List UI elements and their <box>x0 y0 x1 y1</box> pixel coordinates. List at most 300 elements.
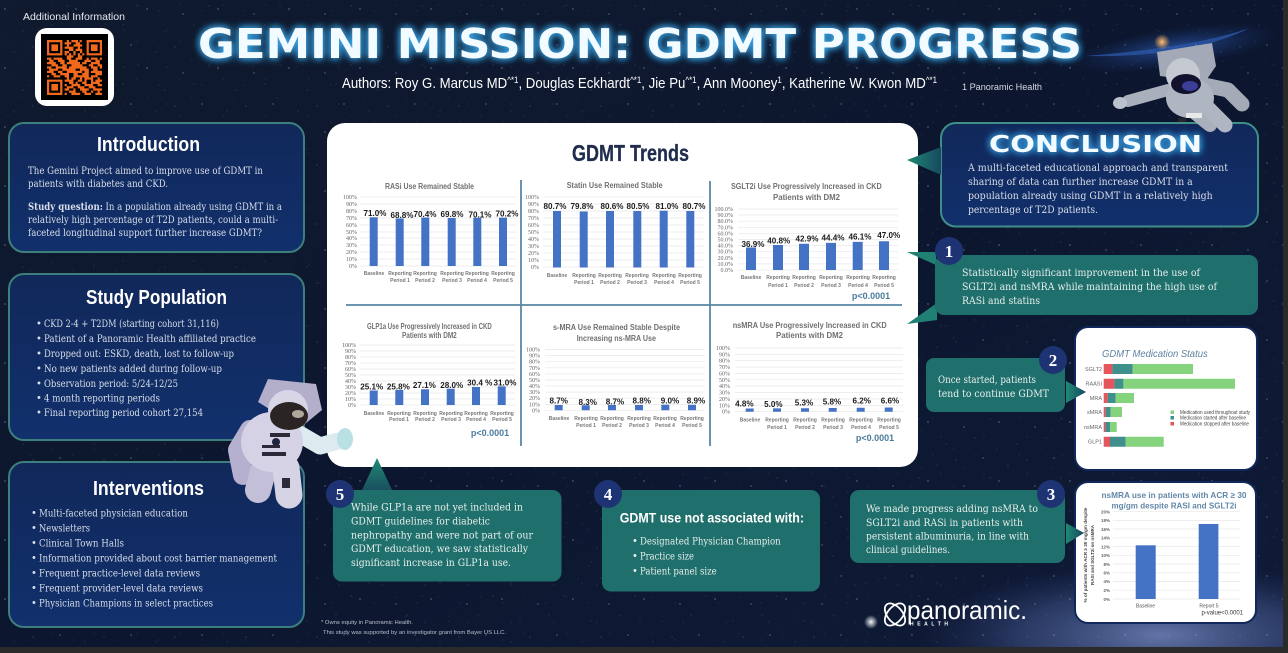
chart: statin: Period 3 <box>627 280 647 286</box>
chart: RASi: 70.2% <box>496 209 518 218</box>
chart: SGLT2i: SGLT2i Use Progressively Increased in CKD <box>731 182 882 191</box>
chart: nsMRA: 30% <box>719 390 730 396</box>
chart: statin: 80.7% <box>544 202 566 211</box>
chart: nsMRA use with ACR: 8% <box>1103 562 1110 567</box>
chart: s-MRA: 30% <box>529 390 540 396</box>
chart: nsMRA: 100% <box>716 346 730 352</box>
callout: finding 3: clinical guidelines. <box>866 545 950 556</box>
callout: finding 1: SGLT2i and nsMRA while maintaining the high use of <box>962 282 1218 293</box>
chart: statin: 0% <box>531 265 539 271</box>
chart: nsMRA use with ACR: Baseline <box>1136 604 1155 610</box>
chart: statin <box>525 181 705 286</box>
arrow: finding 2 <box>1066 381 1086 403</box>
chart: SGLT2i: 60.0% <box>718 231 733 237</box>
chart: s-MRA: 8.9% <box>687 396 705 405</box>
conclusion text: percentage of T2D patients. <box>968 205 1098 216</box>
chart: GLP1a: 31.0% <box>494 378 516 388</box>
astronaut: left <box>238 379 353 495</box>
chart: statin: Reporting <box>598 273 622 279</box>
chart: nsMRA: 6.2% <box>852 397 871 406</box>
chart: nsMRA use with ACR: 0% <box>1103 597 1110 602</box>
study population list: Observation period: 5/24-12/25 <box>44 379 178 390</box>
chart: SGLT2i: Period 1 <box>768 283 788 289</box>
chart: statin: 80.6% <box>601 202 623 211</box>
panel: GDMT trends <box>327 123 918 467</box>
callout: finding 3: We made progress adding nsMRA to <box>866 504 1038 515</box>
authors: Authors: Roy G. Marcus MD <box>342 75 530 92</box>
study population list: CKD 2-4 + T2DM (starting cohort 31,116) <box>44 319 219 330</box>
astronaut: top right <box>1113 43 1242 125</box>
chart: GLP1a: p<0.0001 <box>471 428 509 438</box>
authors: ^*1 <box>685 75 697 85</box>
chart: GDMT medication status: GDMT Medication Status <box>1102 348 1208 360</box>
chart: RASi: Period 3 <box>442 278 462 284</box>
chart: nsMRA: 5.0% <box>764 400 783 409</box>
chart: statin: Reporting <box>678 273 702 279</box>
introduction heading: Introduction <box>97 134 200 156</box>
study population list: 4 month reporting periods <box>44 394 160 404</box>
chart: GLP1a: 60% <box>345 367 356 373</box>
chart: RASi: 40% <box>346 236 357 242</box>
study population list <box>36 319 256 419</box>
chart: nsMRA use with ACR: 20% <box>1101 510 1110 514</box>
chart: SGLT2i: 100.0% <box>714 207 733 213</box>
authors: , Douglas Eckhardt <box>518 75 631 92</box>
chart: statin: 100% <box>525 195 539 201</box>
chart: GLP1a: Period 2 <box>415 417 435 423</box>
callout: finding 4: 4 <box>604 485 613 504</box>
chart: nsMRA use with ACR: mg/gm despite RASI and SGLT2i <box>1112 500 1236 510</box>
chart: GDMT medication status: RAASI <box>1085 382 1102 388</box>
authors: , Ann Mooney <box>697 75 778 92</box>
chart: RASi: 50% <box>346 230 357 236</box>
chart: RASi: 71.0% <box>364 209 386 218</box>
callout: finding 3 <box>850 480 1065 563</box>
callout: finding 5: GDMT guidelines for diabetic <box>351 516 490 528</box>
footnotes <box>321 620 506 636</box>
chart: s-MRA: 80% <box>529 360 540 366</box>
chart: SGLT2i: 0.0% <box>720 268 733 274</box>
chart: SGLT2i: 70.0% <box>718 225 733 231</box>
callout: finding 5: While GLP1a are not yet included in <box>351 502 524 514</box>
chart: RASi <box>343 182 518 284</box>
footnotes: This study was supported by an investigator grant from Bayer US LLC. <box>323 630 506 636</box>
chart: SGLT2i <box>714 182 900 301</box>
conclusion text <box>967 163 1228 216</box>
chart: nsMRA use with ACR: p-value<0.0001 <box>1201 610 1244 616</box>
chart: RASi: Reporting <box>491 271 515 277</box>
GDMT trends heading: GDMT Trends <box>572 140 689 166</box>
chart: SGLT2i: Reporting <box>792 275 816 281</box>
introduction text: The Gemini Project aimed to improve use of GDMT in <box>28 166 263 177</box>
chart: nsMRA use with ACR <box>1075 482 1256 623</box>
interventions list: • <box>31 538 37 550</box>
chart: RASi: Baseline <box>364 271 384 277</box>
chart: nsMRA use with ACR: 14% <box>1101 536 1110 540</box>
chart: RASi: 70.4% <box>414 210 436 219</box>
callout: finding 5: significant increase in GLP1a use. <box>351 558 511 569</box>
panel: introduction <box>9 123 304 252</box>
chart: GLP1a: 0% <box>348 403 356 409</box>
chart: GLP1a: 50% <box>345 373 356 379</box>
chart: statin: 50% <box>528 230 539 236</box>
chart: RASi: 30% <box>346 243 357 249</box>
introduction text: relatively high percentage of T2D patients, could a multi- <box>28 215 278 226</box>
introduction text <box>28 166 282 239</box>
chart: statin: Reporting <box>572 273 596 279</box>
chart: nsMRA: Period 5 <box>879 425 899 431</box>
chart: s-MRA: 10% <box>529 402 540 408</box>
chart: GLP1a <box>342 322 516 438</box>
chart: GLP1a: 30.4 % <box>467 378 492 388</box>
interventions list: • <box>31 524 37 534</box>
chart: s-MRA: 20% <box>529 396 540 402</box>
study population list: Dropped out: ESKD, death, lost to follow-up <box>44 349 234 360</box>
chart: s-MRA: Reporting <box>627 416 651 422</box>
introduction text: faceted longitudinal support further increase GDMT? <box>28 228 262 239</box>
callout: finding 3: SGLT2i and RASi in patients with <box>866 518 1024 529</box>
chart: RASi: 80% <box>346 209 357 215</box>
chart: RASi: Reporting <box>388 271 412 277</box>
chart: SGLT2i: 50.0% <box>718 238 733 244</box>
logo: panoramic health: HEALTH <box>910 622 948 628</box>
arrow: finding 1 upper <box>907 252 936 265</box>
chart: statin: 60% <box>528 223 539 229</box>
chart: s-MRA: 8.8% <box>632 397 651 406</box>
chart: GDMT medication status: MRA <box>1090 396 1102 402</box>
callout: finding 4: GDMT use not associated with: <box>620 510 804 526</box>
chart: s-MRA: 0% <box>532 408 540 414</box>
chart: nsMRA: 0% <box>722 410 730 416</box>
chart: RASi: 68.8% <box>391 211 413 220</box>
chart: GLP1a: 28.0% <box>440 381 463 390</box>
interventions list <box>31 508 277 610</box>
chart: SGLT2i: 90.0% <box>718 213 733 219</box>
chart: nsMRA use with ACR: RASI and SGLT2i on nsMRA <box>1090 524 1095 585</box>
chart: statin: Reporting <box>652 273 676 279</box>
study population list: Final reporting period cohort 27,154 <box>44 408 203 419</box>
chart: GLP1a: Period 4 <box>466 417 486 423</box>
study population list: • <box>36 394 42 404</box>
chart: RASi: RASi Use Remained Stable <box>385 182 474 191</box>
study population list: • <box>36 379 42 390</box>
callout: finding 4: • <box>632 536 638 548</box>
chart: SGLT2i: 42.9% <box>796 235 818 244</box>
study population list: • <box>36 319 42 330</box>
chart: nsMRA use with ACR: Report 5 <box>1199 604 1219 610</box>
chart: s-MRA: 70% <box>529 366 540 372</box>
chart: RASi: Reporting <box>440 271 464 277</box>
arrow: finding 1 lower <box>907 303 937 324</box>
callout: finding 2: tend to continue GDMT <box>938 389 1049 400</box>
chart: GLP1a: Reporting <box>387 411 411 417</box>
interventions list: Physician Champions in select practices <box>39 598 213 610</box>
chart: statin: Baseline <box>547 273 567 279</box>
interventions list: • <box>31 508 37 520</box>
chart: GLP1a: Baseline <box>364 411 384 417</box>
chart: SGLT2i: 30.0% <box>718 250 733 256</box>
chart: statin: 10% <box>528 258 539 264</box>
panel: interventions <box>9 462 304 627</box>
logo: panoramic health <box>881 595 1027 629</box>
chart: GDMT medication status: nsMRA <box>1084 425 1102 431</box>
callout: finding 4: Practice size <box>640 552 694 562</box>
chart: s-MRA: 90% <box>529 354 540 360</box>
chart: nsMRA: Reporting <box>849 418 873 424</box>
chart: RASi: 60% <box>346 223 357 229</box>
authors: ^*1 <box>630 75 641 85</box>
chart: GLP1a: Period 5 <box>492 417 512 423</box>
chart: SGLT2i: 10.0% <box>718 262 733 268</box>
study population list: • <box>36 349 42 360</box>
chart: RASi: 0% <box>349 264 357 270</box>
chart: RASi: 69.8% <box>441 210 463 219</box>
callout: finding 5: nephropathy and were not part of our <box>351 530 533 542</box>
interventions list: Clinical Town Halls <box>39 538 124 550</box>
callout: finding 4: Patient panel size <box>640 566 717 578</box>
callout: finding 4: • <box>632 552 638 562</box>
chart: s-MRA: Period 4 <box>655 423 675 429</box>
chart: nsMRA use with ACR: 18% <box>1101 518 1110 523</box>
introduction text: patients with diabetes and CKD. <box>28 179 168 190</box>
chart: GLP1a: Reporting <box>413 411 437 417</box>
chart: SGLT2i: Period 3 <box>821 283 841 289</box>
callout: finding 1 <box>935 237 1258 315</box>
chart: nsMRA use with ACR: 4% <box>1103 579 1110 584</box>
chart: s-MRA: Reporting <box>574 416 598 422</box>
chart: RASi: Period 2 <box>415 278 435 284</box>
chart: nsMRA use with ACR: 2% <box>1103 588 1110 593</box>
arrow: conclusion to chart <box>907 147 941 175</box>
chart: GDMT medication status: sMRA <box>1087 410 1102 416</box>
panel: study population <box>9 274 304 440</box>
chart: GLP1a: 20% <box>345 391 356 397</box>
callout: finding 4 <box>594 480 820 592</box>
introduction text: Study question: In a population already using GDMT in a <box>28 202 282 213</box>
chart: statin: 79.8% <box>571 202 593 211</box>
chart: SGLT2i: 80.0% <box>718 219 733 225</box>
chart: nsMRA: Period 2 <box>795 425 815 431</box>
chart: nsMRA: Baseline <box>740 418 760 424</box>
callout: finding 2: 2 <box>1049 351 1057 370</box>
interventions list: • <box>31 598 37 610</box>
chart: s-MRA: Period 1 <box>576 423 596 429</box>
chart: s-MRA: Increasing ns-MRA Use <box>577 334 656 343</box>
chart: GDMT medication status: Medication used throughout study <box>1180 410 1250 416</box>
interventions list: Newsletters <box>39 524 90 534</box>
chart: GLP1a: 80% <box>345 355 356 361</box>
chart: statin: Reporting <box>625 273 649 279</box>
chart: SGLT2i: 40.0% <box>718 244 733 250</box>
chart: s-MRA: Reporting <box>600 416 624 422</box>
conclusion text: population already using GDMT in a relatively high <box>968 191 1213 202</box>
chart: GDMT medication status: Medication stopped after baseline <box>1180 422 1249 428</box>
chart: s-MRA: 50% <box>529 378 540 384</box>
arrow: finding 5 <box>362 458 392 490</box>
chart: nsMRA: Reporting <box>793 418 817 424</box>
logo: panoramic health: panoramic. <box>907 595 1027 625</box>
interventions list: Frequent practice-level data reviews <box>39 568 200 580</box>
chart: statin: Period 2 <box>600 280 620 286</box>
callout: finding 2: Once started, patients <box>938 375 1036 386</box>
interventions list: Multi-faceted physician education <box>39 508 188 520</box>
footnotes: * Owns equity in Panoramic Health. <box>321 620 413 626</box>
chart: RASi: 70% <box>346 216 357 222</box>
chart: SGLT2i: Reporting <box>766 275 790 281</box>
chart: nsMRA use with ACR: 12% <box>1101 544 1110 549</box>
chart: s-MRA: 8.7% <box>549 397 568 406</box>
interventions list: • <box>31 568 37 580</box>
chart: nsMRA: 20% <box>719 397 730 403</box>
chart: RASi: 10% <box>346 257 357 263</box>
chart: s-MRA: Baseline <box>549 416 569 422</box>
authors: ^*1 <box>507 75 518 85</box>
interventions list: • <box>31 554 37 564</box>
chart: statin: Period 5 <box>680 280 700 286</box>
chart: nsMRA: 5.3% <box>795 398 813 407</box>
chart: GDMT medication status: SGLT2 <box>1085 367 1102 373</box>
chart: statin: Period 1 <box>574 280 594 286</box>
chart: nsMRA use with ACR: nsMRA use in patients with ACR ≥ 30 <box>1102 490 1247 500</box>
panel: conclusion <box>941 123 1258 226</box>
callout: finding 5 <box>326 480 562 582</box>
study population heading: Study Population <box>86 287 227 309</box>
chart: SGLT2i: Baseline <box>741 275 761 281</box>
chart: nsMRA: 70% <box>719 365 730 371</box>
chart: SGLT2i: 20.0% <box>718 256 733 262</box>
chart: nsMRA: p<0.0001 <box>856 433 894 443</box>
chart: SGLT2i: 47.0% <box>877 231 900 240</box>
authors: , Jie Pu <box>641 75 685 92</box>
chart: nsMRA: Reporting <box>821 418 845 424</box>
chart: statin: 80.5% <box>627 202 649 211</box>
chart: statin: 40% <box>528 237 539 243</box>
chart: nsMRA: Period 3 <box>823 425 843 431</box>
chart: s-MRA: 100% <box>526 348 540 354</box>
chart: SGLT2i: 44.4% <box>822 234 844 243</box>
chart: nsMRA use with ACR: % of patients with ACR ≥ 30 mg/gm despite <box>1083 507 1088 602</box>
chart: nsMRA: 6.6% <box>881 397 899 406</box>
chart: RASi: Reporting <box>465 271 489 277</box>
chart: RASi: Period 1 <box>390 278 410 284</box>
chart: s-MRA: Period 2 <box>602 423 622 429</box>
chart: s-MRA: 60% <box>529 372 540 378</box>
callout: finding 4: Designated Physician Champion <box>640 536 781 548</box>
chart: RASi: 100% <box>343 195 357 201</box>
chart: SGLT2i: Reporting <box>846 275 870 281</box>
chart: RASi: 90% <box>346 202 357 208</box>
chart: nsMRA <box>716 321 903 443</box>
chart: nsMRA: 4.8% <box>735 400 754 409</box>
chart: SGLT2i: 40.8% <box>767 237 790 246</box>
chart: statin: 80.7% <box>683 202 705 211</box>
chart: statin: 81.0% <box>656 202 678 211</box>
chart: GLP1a: Reporting <box>490 411 514 417</box>
chart: GDMT medication status <box>1075 327 1257 470</box>
callout: finding 1: 1 <box>945 242 953 261</box>
chart: nsMRA: Reporting <box>765 418 789 424</box>
chart: nsMRA: nsMRA Use Progressively Increased in CKD <box>733 321 887 330</box>
chart: GLP1a: Reporting <box>439 411 463 417</box>
chart: GLP1a: GLP1a Use Progressively Increased in CKD <box>367 322 492 331</box>
chart: RASi: Period 4 <box>467 278 487 284</box>
chart: SGLT2i: Reporting <box>872 275 896 281</box>
chart: nsMRA use with ACR: 6% <box>1103 570 1110 576</box>
callout: finding 3: persistent albuminuria, in line with <box>866 532 1030 542</box>
chart: s-MRA: 8.3% <box>578 398 597 407</box>
interventions list: Frequent provider-level data reviews <box>39 584 203 594</box>
chart: s-MRA: s-MRA Use Remained Stable Despite <box>553 323 680 332</box>
callout: finding 1: Statistically significant improvement in the use of <box>962 268 1201 279</box>
chart: SGLT2i: Reporting <box>819 275 843 281</box>
chart: SGLT2i: p<0.0001 <box>852 291 890 301</box>
chart: GLP1a: 70% <box>345 361 356 367</box>
chart: GDMT medication status: Medication started after baseline <box>1180 416 1246 422</box>
chart: GLP1a: 90% <box>345 349 356 355</box>
study population list: • <box>36 364 42 375</box>
chart: nsMRA: 50% <box>719 378 730 384</box>
chart: nsMRA: Reporting <box>877 418 901 424</box>
chart: nsMRA: 5.8% <box>823 397 841 406</box>
chart: s-MRA: 9.0% <box>661 396 679 405</box>
chart: nsMRA use with ACR: 10% <box>1101 553 1110 558</box>
chart: s-MRA: Period 5 <box>682 423 702 429</box>
arrow: finding 3 <box>1066 523 1084 544</box>
study population list: No new patients added during follow-up <box>44 364 222 375</box>
chart: statin: Period 4 <box>654 280 674 286</box>
chart: GDMT medication status: GLP1 <box>1088 440 1102 446</box>
chart: GLP1a: 25.8% <box>387 382 410 392</box>
affiliation: 1 Panoramic Health <box>962 82 1042 93</box>
chart: GLP1a: 10% <box>345 397 356 403</box>
chart: nsMRA: 10% <box>719 403 730 409</box>
chart: RASi: Reporting <box>413 271 437 277</box>
callout: finding 5: GDMT education, we saw statistically <box>351 544 528 555</box>
chart: s-MRA: 8.7% <box>606 397 624 406</box>
conclusion heading: CONCLUSION <box>989 132 1202 158</box>
interventions list: Information provided about cost barrier management <box>39 554 277 564</box>
chart: GLP1a: Period 3 <box>441 417 461 423</box>
conclusion text: sharing of data can further increase GDMT in a <box>968 177 1193 188</box>
chart: GLP1a: 27.1% <box>413 381 436 390</box>
chart: GLP1a: Period 1 <box>389 417 409 423</box>
chart: nsMRA: 60% <box>719 372 730 378</box>
chart: s-MRA <box>526 323 705 429</box>
callout: finding 4: • <box>632 566 638 578</box>
chart: RASi: Period 5 <box>493 278 513 284</box>
chart: statin: 20% <box>528 251 539 257</box>
chart: GLP1a: 25.1% <box>360 382 383 392</box>
callout: finding 2 <box>926 346 1067 412</box>
chart: statin: 70% <box>528 216 539 222</box>
callout: finding 3: 3 <box>1047 485 1055 504</box>
chart: s-MRA: Reporting <box>653 416 677 422</box>
chart: s-MRA: Period 3 <box>629 423 649 429</box>
chart: statin: 90% <box>528 202 539 208</box>
chart: nsMRA: Period 4 <box>851 425 871 431</box>
chart: GLP1a: Reporting <box>464 411 488 417</box>
chart: RASi: 20% <box>346 250 357 256</box>
chart: statin: 80% <box>528 209 539 215</box>
chart: SGLT2i: Patients with DM2 <box>773 193 841 202</box>
authors: ^*1 <box>926 75 937 85</box>
chart: SGLT2i: Period 5 <box>874 283 894 289</box>
study population list: Patient of a Panoramic Health affiliated practice <box>44 334 256 345</box>
chart: SGLT2i: 36.9% <box>742 240 764 249</box>
chart: nsMRA: 80% <box>719 359 730 365</box>
chart: s-MRA: Reporting <box>680 416 704 422</box>
chart: statin: Statin Use Remained Stable <box>567 181 663 190</box>
